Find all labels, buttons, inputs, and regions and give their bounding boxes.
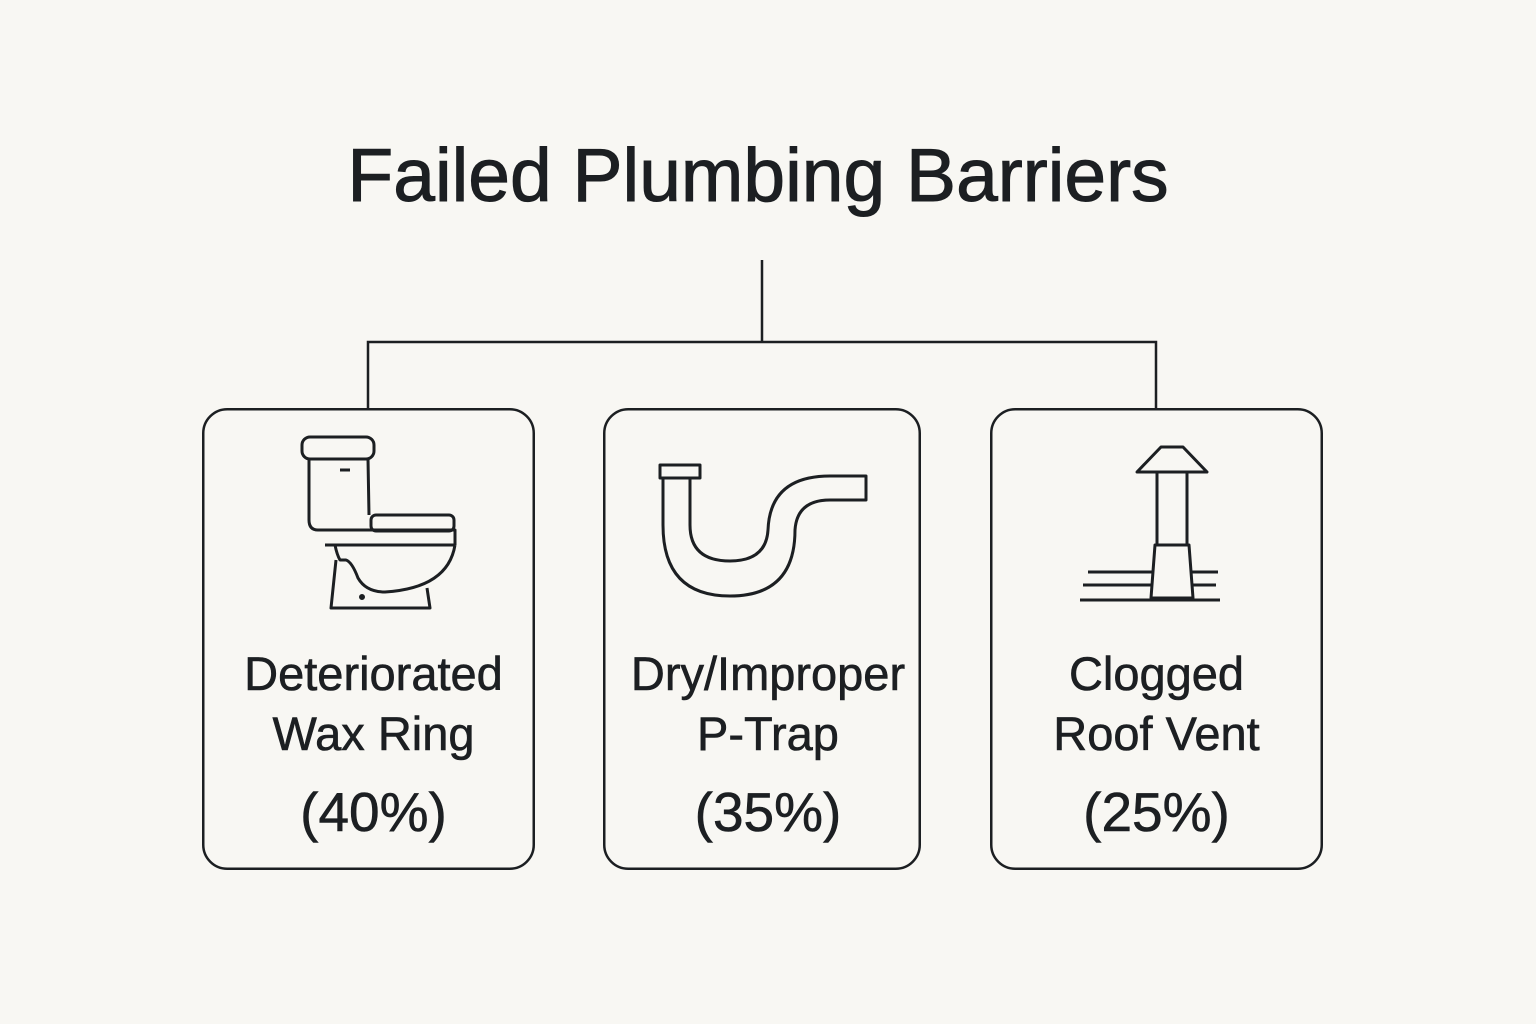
panel: p-trap [603, 408, 921, 870]
title: Failed Plumbing Barriers [347, 133, 1169, 217]
percentage: (25%) [1083, 781, 1230, 843]
label: Wax Ring [272, 707, 474, 760]
label: Clogged [1069, 647, 1244, 700]
panel: roof vent [990, 408, 1323, 870]
percentage: (35%) [695, 781, 841, 843]
label: Dry/Improper [631, 647, 905, 700]
icon: toilet [302, 437, 455, 608]
percentage: (40%) [300, 781, 447, 843]
icon: p-trap pipe [660, 465, 866, 596]
icon: roof vent [1080, 447, 1220, 600]
label [631, 647, 905, 760]
label: P-Trap [697, 707, 839, 760]
label: Roof Vent [1053, 707, 1260, 760]
label [1053, 647, 1260, 760]
label [244, 647, 503, 760]
panel: wax ring [202, 408, 535, 870]
label: Deteriorated [244, 647, 503, 700]
